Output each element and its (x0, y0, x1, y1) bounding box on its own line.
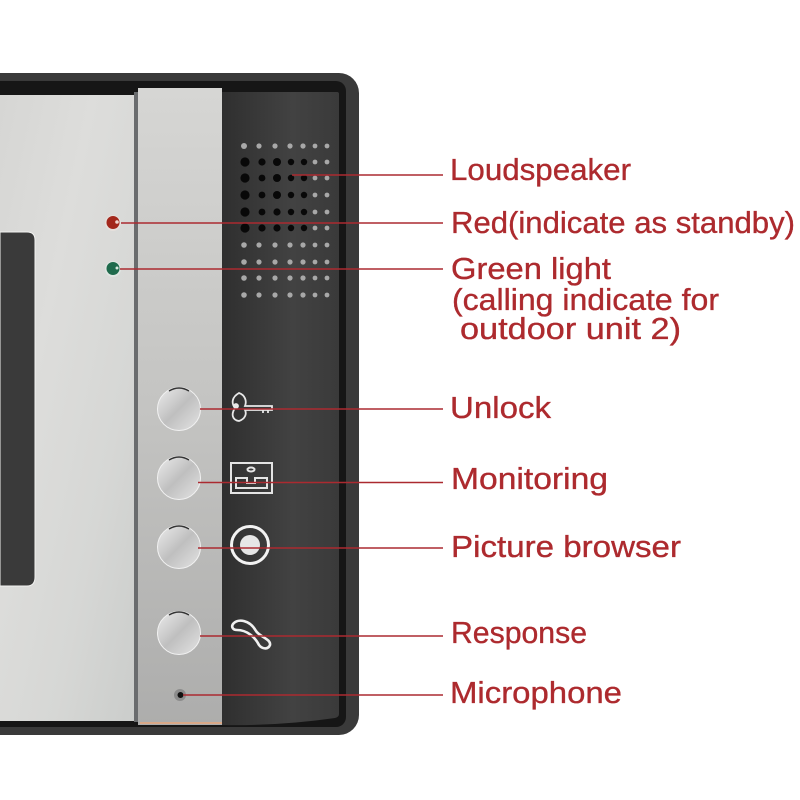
device body (0, 73, 359, 735)
microphone hole (174, 689, 186, 701)
label: Response: Response (451, 615, 587, 650)
icon: key (233, 393, 272, 421)
dark speaker panel (222, 92, 339, 725)
icon: handset (232, 621, 270, 648)
label: Loudspeaker: Loudspeaker (450, 152, 631, 187)
label: Picture browser: Picture browser (451, 529, 681, 564)
button: response (158, 612, 200, 654)
speaker grille (240, 143, 329, 298)
left silver faceplate (0, 95, 134, 721)
outer frame (0, 73, 359, 735)
label: Green light: (calling indicate for (452, 282, 719, 317)
button: monitoring (158, 456, 200, 500)
icon: green LED (105, 261, 121, 277)
label: Green light: outdoor unit 2) (460, 311, 681, 346)
button: unlock (158, 388, 200, 430)
centre button strip (138, 88, 222, 725)
label: Unlock: Unlock (450, 390, 552, 425)
buttons (158, 388, 200, 701)
icon: monitoring (231, 463, 272, 493)
label: Green light (451, 251, 719, 346)
screen (0, 232, 35, 586)
icon: red LED (105, 215, 121, 231)
icon: record circle (232, 526, 268, 564)
button: picture browser (158, 526, 200, 568)
label: Microphone: Microphone (450, 675, 622, 710)
leader lines (120, 175, 443, 695)
inner black recess (0, 81, 346, 727)
label: Red: Red(indicate as standby) (451, 205, 795, 240)
label: Green light: Green light (451, 251, 611, 286)
label: Monitoring: Monitoring (451, 461, 608, 496)
